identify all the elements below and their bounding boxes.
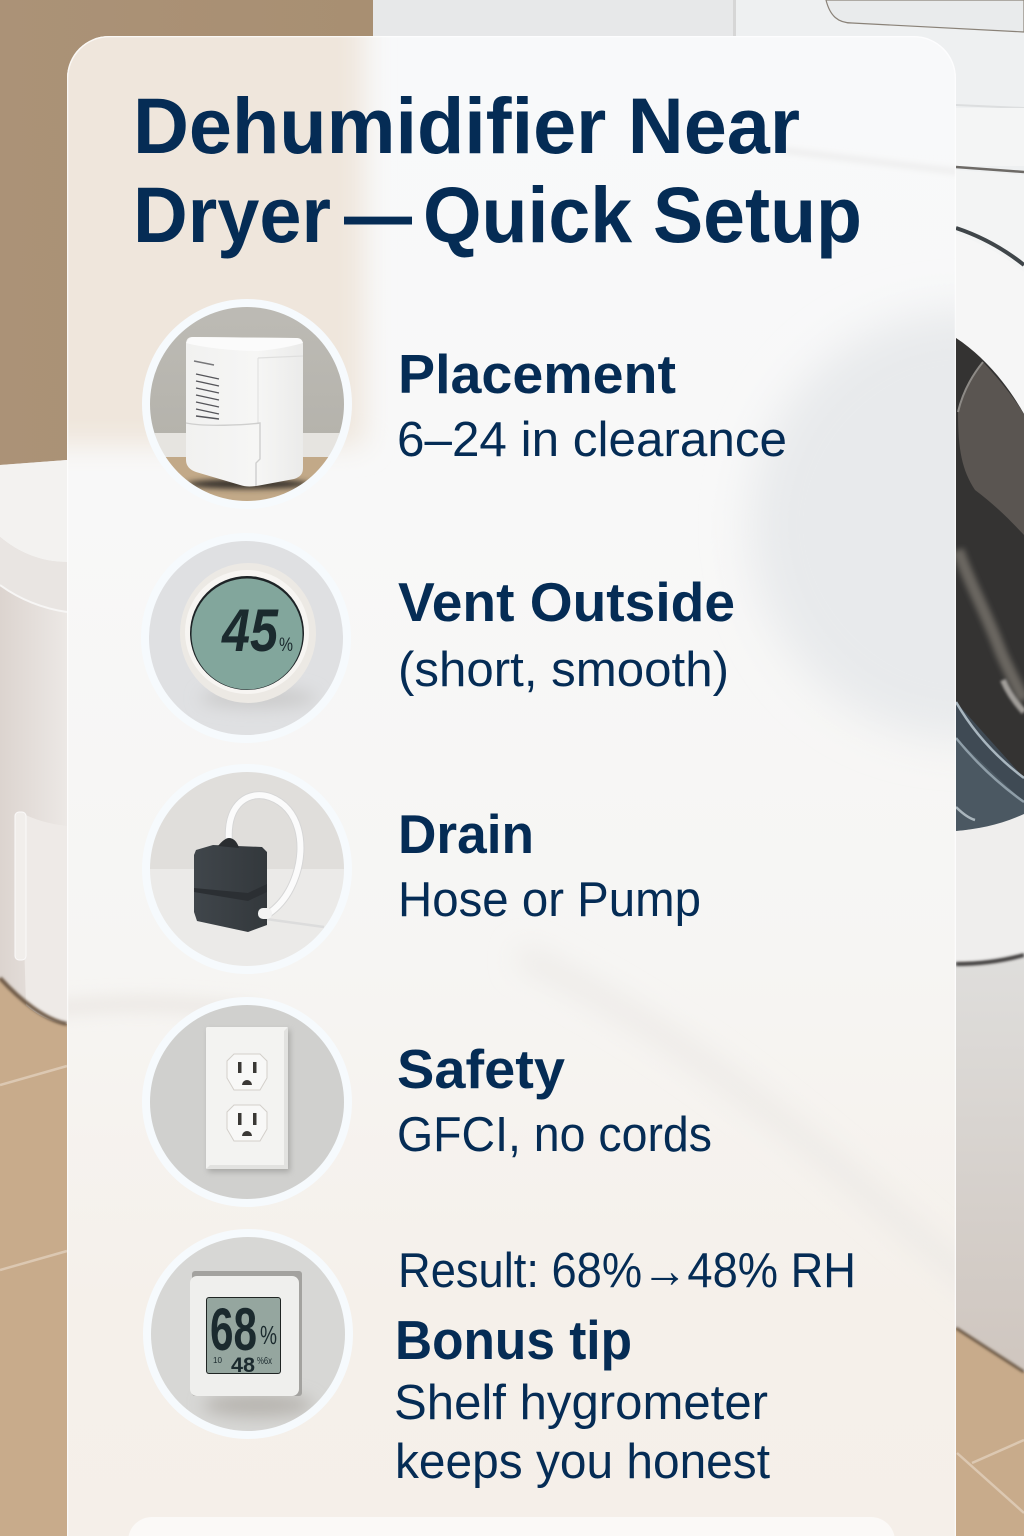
result and bonus tip text <box>394 1244 856 1489</box>
washer top and front <box>373 0 1024 560</box>
icon: shelf hygrometer showing 68% and 48: 68 <box>210 1296 257 1363</box>
title: Dryer <box>133 170 331 259</box>
floor tiles <box>0 960 1024 1536</box>
icon: condensate pump photo <box>140 760 355 979</box>
icon: dehumidifier photo <box>140 299 355 509</box>
step: drain text: Hose or Pump <box>398 873 701 927</box>
left storage bin <box>0 460 67 1024</box>
icon: round hygrometer reading 45%: 45 <box>221 597 279 664</box>
panel tint: blurred drum shadow <box>752 312 955 736</box>
bonus tip body: Shelf hygrometer <box>394 1376 768 1430</box>
step: vent outside text <box>398 571 735 697</box>
step: placement text <box>397 343 787 467</box>
title: Quick Setup <box>423 170 862 259</box>
step: safety text <box>397 1038 712 1162</box>
icon: round hygrometer reading 45% <box>149 541 343 735</box>
bonus tip body <box>394 1376 770 1489</box>
step: safety text: GFCI, no cords <box>397 1108 712 1162</box>
icon: shelf hygrometer showing 68% and 48: % <box>260 1320 277 1350</box>
washer drum <box>956 338 1024 831</box>
washer pedestal <box>956 953 1024 1372</box>
step: placement text: Placement <box>398 343 676 405</box>
step: vent outside text: Vent Outside <box>398 571 735 633</box>
step: safety text: Safety <box>397 1038 565 1100</box>
icon: shelf hygrometer showing 68% and 48: %6x <box>257 1356 272 1367</box>
wall <box>0 0 373 480</box>
step: vent outside text: (short, smooth) <box>398 643 729 697</box>
panel tint: beige wall show-through <box>67 36 372 454</box>
bonus tip heading: Bonus tip <box>395 1309 632 1371</box>
icon: shelf hygrometer showing 68% and 48: 10 <box>213 1356 223 1365</box>
step: placement text: 6–24 in clearance <box>397 413 787 467</box>
icon: shelf hygrometer showing 68% and 48 <box>140 1228 355 1443</box>
bottom white strip <box>128 1517 895 1536</box>
bonus tip body: keeps you honest <box>395 1435 770 1489</box>
washer lower bezel <box>956 814 1024 962</box>
title: Dehumidifier Near <box>133 81 800 170</box>
icon: GFCI wall outlet photo <box>140 995 355 1210</box>
title: — <box>344 170 412 259</box>
title <box>133 81 862 259</box>
icon: shelf hygrometer showing 68% and 48: 48 <box>231 1354 255 1377</box>
result line: Result: 68%→48% RH <box>398 1244 856 1298</box>
icon: round hygrometer reading 45%: % <box>279 635 293 656</box>
panel tint: blurred streaks <box>20 150 980 1290</box>
step: drain text <box>398 803 701 927</box>
step: drain text: Drain <box>398 803 534 865</box>
